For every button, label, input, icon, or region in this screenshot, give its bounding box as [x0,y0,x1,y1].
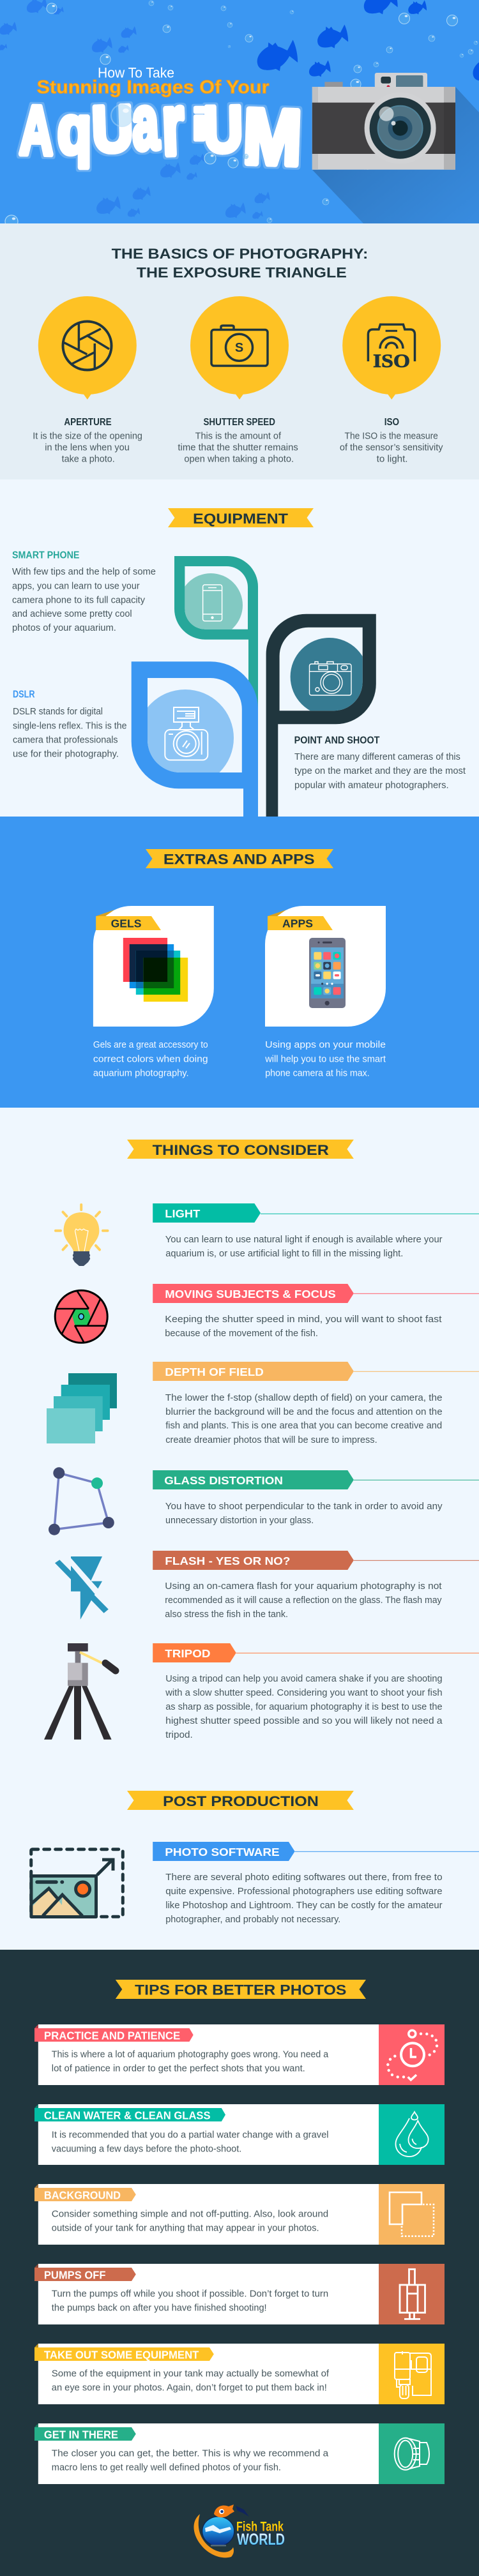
text: tripod: highest shutter speed possible and so you will likely not need a [165,1715,443,1726]
text: gels: aquarium photography. [93,1067,189,1078]
text: point and shoot [294,735,466,790]
text: photo software: quite expensive. Professional photographers use editing software [165,1886,443,1897]
card: gels [93,906,214,1027]
item: moving subjects [55,1284,479,1343]
tip: take out some equipment [34,2344,445,2404]
icon: frame shapes [390,2192,434,2236]
title: how to take: How To Take [98,65,174,80]
tip: background: Consider something simple and not off-putting. Also, look around [52,2208,328,2219]
icon: light bulb [56,1205,107,1266]
icon: stacked squares [47,1373,117,1443]
label: flash [153,1551,479,1570]
label: depth of field: DEPTH OF FIELD [165,1366,264,1378]
label: photo software: PHOTO SOFTWARE [165,1846,280,1858]
text: tripod: with a slow shutter speed. Considering you want to shoot your fish [165,1687,443,1698]
banner: equipment [168,508,314,527]
tip: take out some equipment: TAKE OUT SOME EQUIPMENT [44,2348,199,2361]
text: aperture: It is the size of the opening [33,430,142,441]
tip: pumps off: PUMPS OFF [44,2268,106,2281]
icon: macro lens [395,2438,429,2470]
text: aperture: take a photo. [62,453,115,464]
icon: shutter speed camera [190,296,289,400]
text: iso [340,417,443,464]
title: aquarium [19,77,303,182]
text: iso: The ISO is the measure [345,430,438,441]
icon: clock cycle [386,2030,438,2080]
label: moving subjects [153,1284,479,1303]
text: apps [264,1039,386,1078]
text: flash [165,1581,442,1620]
tip: pumps off [34,2264,445,2324]
text: smart phone: With few tips and the help of some [12,566,156,577]
item: glass distortion [49,1467,479,1535]
text: tripod: as sharp as possible, for aquarium photography it is best to use the [165,1701,443,1712]
icon: dslr camera [165,707,208,760]
icon: resize image [31,1849,123,1917]
heading: basics of photography: THE BASICS OF PHOTOGRAPHY: [112,246,368,262]
item: photo software [31,1842,479,1925]
text: flash: also stress the fish in the tank. [165,1609,288,1620]
tip: get in there: The closer you can get, the better. This is why we recommend a [52,2448,329,2459]
icon: smartphone apps [309,938,346,1008]
text: glass distortion: You have to shoot perpendicular to the tank in order to avoid any [165,1501,443,1512]
banner: things to consider: THINGS TO CONSIDER [153,1142,329,1158]
tip: clean water [34,2104,445,2165]
text: dslr: camera that professionals [13,734,118,745]
panel: things to consider [0,1108,479,1950]
text: smart phone: and achieve some pretty cool [12,608,132,619]
icon: overlapping gels [123,938,188,1002]
text: point and shoot: popular with amateur photographers. [294,780,449,790]
logo: fish tank world [194,2504,285,2557]
title: aquarium: U [203,93,243,166]
camera illustration [312,73,479,223]
text: smart phone: photos of your aquarium. [12,622,116,633]
text: apps: Using apps on your mobile [265,1039,386,1050]
text: point and shoot: type on the market and they are the most [294,765,466,776]
icon: phone [203,585,222,621]
card: gels: GELS [111,917,142,930]
card: apps: APPS [282,917,313,930]
banner: things to consider [127,1140,354,1159]
title: aquarium: q [57,91,91,168]
header panel [0,0,479,228]
icon: iso camera [342,296,441,400]
leaf: dslr [132,661,258,817]
label: depth of field [153,1362,479,1381]
text: tripod [165,1673,443,1740]
text: dslr [13,689,126,759]
text: depth of field: fish and plants. This is one area that you can become creative and [165,1420,442,1431]
title: stunning images of your: Stunning Images Of Your [37,77,270,98]
bubbles over title [111,105,248,168]
text: shutter speed: open when taking a photo. [184,453,294,464]
label: moving subjects: MOVING SUBJECTS & FOCUS [165,1288,336,1300]
label: light: LIGHT [165,1207,201,1220]
text: smart phone: SMART PHONE [12,550,79,561]
title: aquarium: A [19,92,54,169]
text: dslr: single-lens reflex. This is the [13,720,126,731]
text: photo software [165,1872,443,1925]
panel: tips for better photos [0,1950,479,2576]
icon: shutter speed camera: S [235,341,243,355]
text: depth of field: blurrier the background will be and the focus and attention on the [165,1406,443,1417]
text: depth of field: The lower the f-stop (shallow depth of field) on your camera, the [165,1392,443,1403]
text: tripod: tripod. [165,1729,193,1740]
label: glass distortion: GLASS DISTORTION [164,1474,283,1487]
title: aquarium: r [160,77,185,172]
text: iso: ISO [384,417,399,428]
tip: take out some equipment: Some of the equipment in your tank may actually be somewhat of [52,2368,330,2379]
icon: aquarium filter [395,2351,431,2399]
tip: practice and patience: This is where a lot of aquarium photography goes wrong. You need a [52,2049,329,2060]
leaf: smart phone [174,556,258,709]
text: depth of field [165,1392,443,1445]
label: photo software [153,1842,479,1861]
text: dslr: DSLR [13,689,34,700]
label: glass distortion [153,1470,479,1489]
text: gels: correct colors when doing [93,1053,208,1064]
panel: exposure triangle [0,223,479,479]
text: gels [93,1039,208,1078]
icon: iso camera: ISO [373,350,410,372]
text: smart phone: apps, you can learn to use your [12,580,140,591]
label: light [153,1203,479,1223]
tip: get in there: macro lens to get really well defined photos of your fish. [52,2462,281,2473]
label: tripod [153,1643,479,1662]
icon: compact camera [309,661,351,695]
text: shutter speed: time that the shutter remains [178,442,298,453]
text: flash: recommended as it will cause a reflection on the glass. The flash may [165,1595,442,1606]
text: shutter speed [178,417,298,464]
banner: equipment: EQUIPMENT [193,511,289,527]
text: light: aquarium is, or use artificial light to fill in the missing light. [165,1248,403,1259]
text: aperture [33,417,142,464]
banner: extras and apps: EXTRAS AND APPS [163,851,315,867]
text: shutter speed: SHUTTER SPEED [203,417,275,428]
leaf: point and shoot [266,614,376,817]
banner: tips: TIPS FOR BETTER PHOTOS [135,1982,346,1998]
tip: pumps off: the pumps back on after you have finished shooting! [52,2302,267,2313]
tip: get in there [34,2423,445,2484]
tip: take out some equipment: an eye sore in your photos. Again, don’t forget to put them back in! [52,2382,327,2393]
text: dslr: DSLR stands for digital [13,706,103,717]
tip: get in there: GET IN THERE [44,2428,118,2441]
banner: tips [116,1980,366,1999]
text: light: You can learn to use natural light if enough is available where your [165,1234,443,1245]
text: apps: will help you to use the smart [264,1053,386,1064]
text: shutter speed: This is the amount of [195,430,282,441]
text: point and shoot: There are many different cameras of this [294,751,460,762]
icon: distortion quadrilateral [49,1467,114,1535]
text: dslr: use for their photography. [13,748,119,759]
icon: red aperture [55,1290,107,1343]
text: smart phone [12,550,156,633]
tip: background [34,2184,445,2245]
title: aquarium: U [91,92,134,166]
icon: no flash [55,1555,112,1620]
banner: extras and apps [146,849,333,868]
text: depth of field: create dreamier photos that will be sure to impress. [165,1435,377,1445]
tip: background: BACKGROUND [44,2188,121,2201]
title: aquarium: M [242,92,303,182]
icon: tripod [44,1643,116,1740]
text: light [165,1234,443,1259]
fish and bubbles background [0,0,479,228]
panel: equipment [12,508,466,817]
text: smart phone: camera phone to its full capacity [12,594,145,605]
banner: post production [127,1791,354,1810]
tip: clean water: It is recommended that you do a partial water change with a gravel [52,2129,329,2140]
text: point and shoot: POINT AND SHOOT [294,735,380,746]
text: photo software: like Photoshop and Lightroom. They can be costly for the amateur [165,1900,443,1911]
title: aquarium: a [130,80,162,166]
text: iso: of the sensor’s sensitivity [340,442,443,453]
title: aquarium: i [192,100,207,149]
tip: practice and patience: PRACTICE AND PATIENCE [44,2029,180,2042]
icon: pump [400,2269,425,2319]
text: gels: Gels are a great accessory to [93,1039,208,1050]
label: flash: FLASH - YES OR NO? [165,1555,290,1567]
tip: pumps off: Turn the pumps off while you shoot if possible. Don’t forget to turn [52,2288,328,2299]
heading: basics of photography [112,246,368,280]
text: tripod: Using a tripod can help you avoid camera shake if you are shooting [165,1673,443,1684]
text: aperture: APERTURE [64,417,112,428]
text: iso: to light. [377,453,407,464]
label: tripod: TRIPOD [165,1647,211,1660]
panel: extras and apps [0,817,479,1108]
heading: basics of photography: THE EXPOSURE TRIANGLE [137,264,347,280]
text: moving subjects [165,1314,442,1339]
text: moving subjects: Keeping the shutter speed in mind, you will want to shoot fast [165,1314,442,1325]
item: flash [55,1551,479,1620]
tip: background: outside of your tank for anything that may appear in your photos. [52,2222,319,2233]
text: photo software: photographer, and probably not necessary. [165,1914,340,1925]
card: apps [265,906,386,1027]
text: flash: Using an on-camera flash for your aquarium photography is not [165,1581,442,1592]
text: moving subjects: because of the movement of the fish. [165,1328,318,1339]
logo: fish tank world: Fish Tank [236,2519,284,2534]
text: apps: phone camera at his max. [265,1067,370,1078]
item: tripod [44,1643,479,1740]
tip: clean water: CLEAN WATER & CLEAN GLASS [44,2109,211,2121]
text: photo software: There are several photo editing softwares out there, from free to [165,1872,443,1883]
text: glass distortion: unnecessary distortion in your glass. [165,1515,314,1526]
tip: practice and patience [34,2024,445,2085]
text: glass distortion [165,1501,443,1526]
icon: aperture [38,296,137,400]
icon: water drops [396,2112,429,2157]
item: depth of field [47,1362,479,1445]
banner: post production: POST PRODUCTION [163,1793,319,1809]
logo: fish tank world: WORLD [237,2531,285,2549]
tip: practice and patience: lot of patience in order to get the perfect shots that you want. [52,2063,305,2074]
tip: clean water: vacuuming a few days before the photo-shoot. [52,2143,241,2154]
text: aperture: in the lens when you [45,442,130,453]
item: light [56,1203,479,1266]
